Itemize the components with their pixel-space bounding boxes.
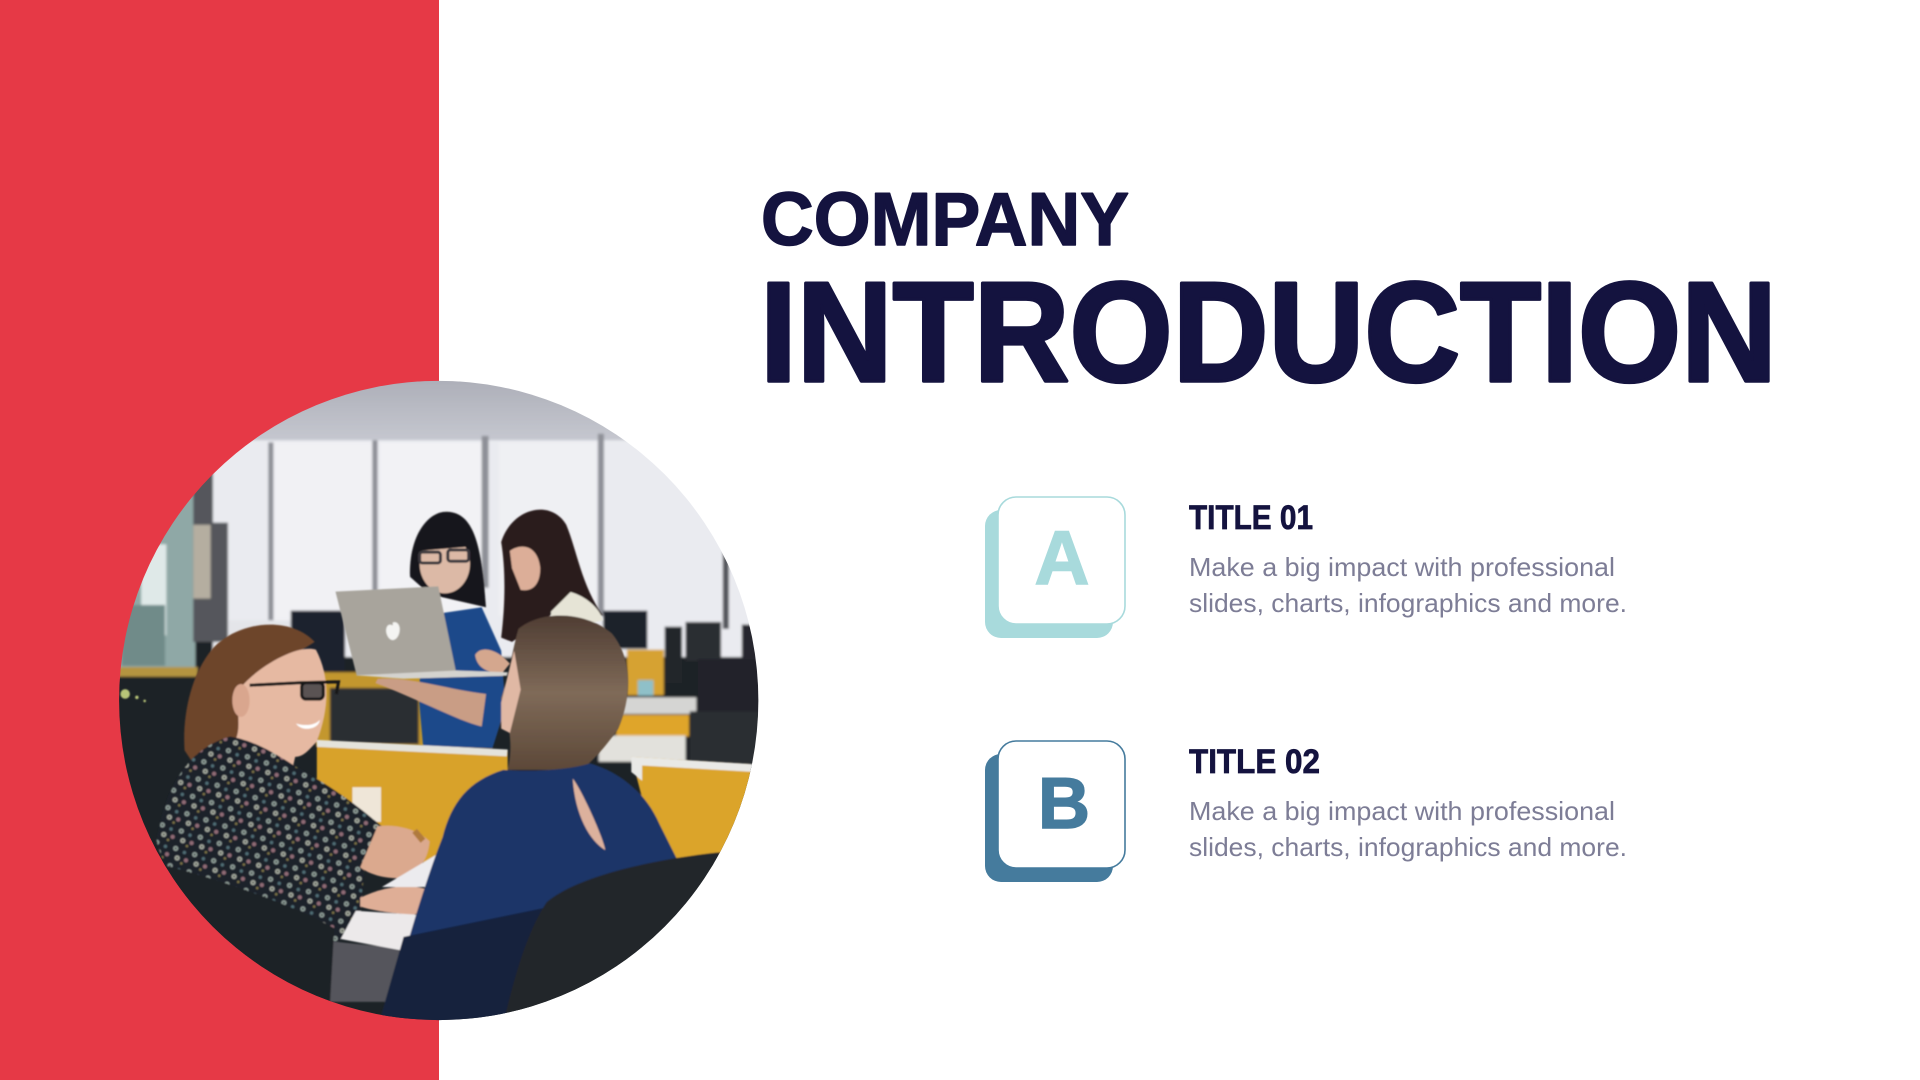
photo: standing woman with dark hair <box>475 510 603 674</box>
icon: badge A: A <box>1035 516 1089 601</box>
text block: title 02: slides, charts, infographics and more. <box>1189 832 1627 862</box>
photo: silver laptop with logo <box>335 586 508 679</box>
icon: badge A <box>985 497 1125 638</box>
icon: badge B: B <box>1038 764 1090 844</box>
photo: plant detail <box>120 689 146 702</box>
text block: title 02: Make a big impact with professional <box>1189 796 1615 826</box>
text block: title 02: TITLE 02 <box>1189 743 1320 781</box>
photo: right office chair <box>503 852 720 1024</box>
panel: red side background <box>0 0 439 1080</box>
text block: title 01: Make a big impact with professional <box>1189 552 1615 582</box>
title: heading <box>760 177 1777 412</box>
photo: left office chair <box>165 865 334 1006</box>
heading line: INTRODUCTION: INTRODUCTION <box>760 253 1777 412</box>
text block: title 01 <box>1189 499 1627 618</box>
photo: desk and paper <box>330 852 440 1002</box>
item B: badge and text <box>985 741 1627 882</box>
photo: smiling woman with floral top <box>156 625 430 945</box>
text block: title 02 <box>1189 743 1627 862</box>
photo: woman with long hair seen from behind <box>378 616 677 1028</box>
item A: badge and text <box>985 497 1627 638</box>
icon: badge B <box>985 741 1125 882</box>
heading line: COMPANY: COMPANY <box>761 177 1129 261</box>
photo: front cubicle partitions <box>317 740 755 867</box>
photo background: ceiling, windows and far wall <box>119 380 758 1020</box>
photo: office team in circular crop <box>119 380 758 1020</box>
text block: title 01: TITLE 01 <box>1189 499 1313 537</box>
photo: standing woman with glasses <box>375 512 506 748</box>
text block: title 01: slides, charts, infographics and more. <box>1189 588 1627 618</box>
